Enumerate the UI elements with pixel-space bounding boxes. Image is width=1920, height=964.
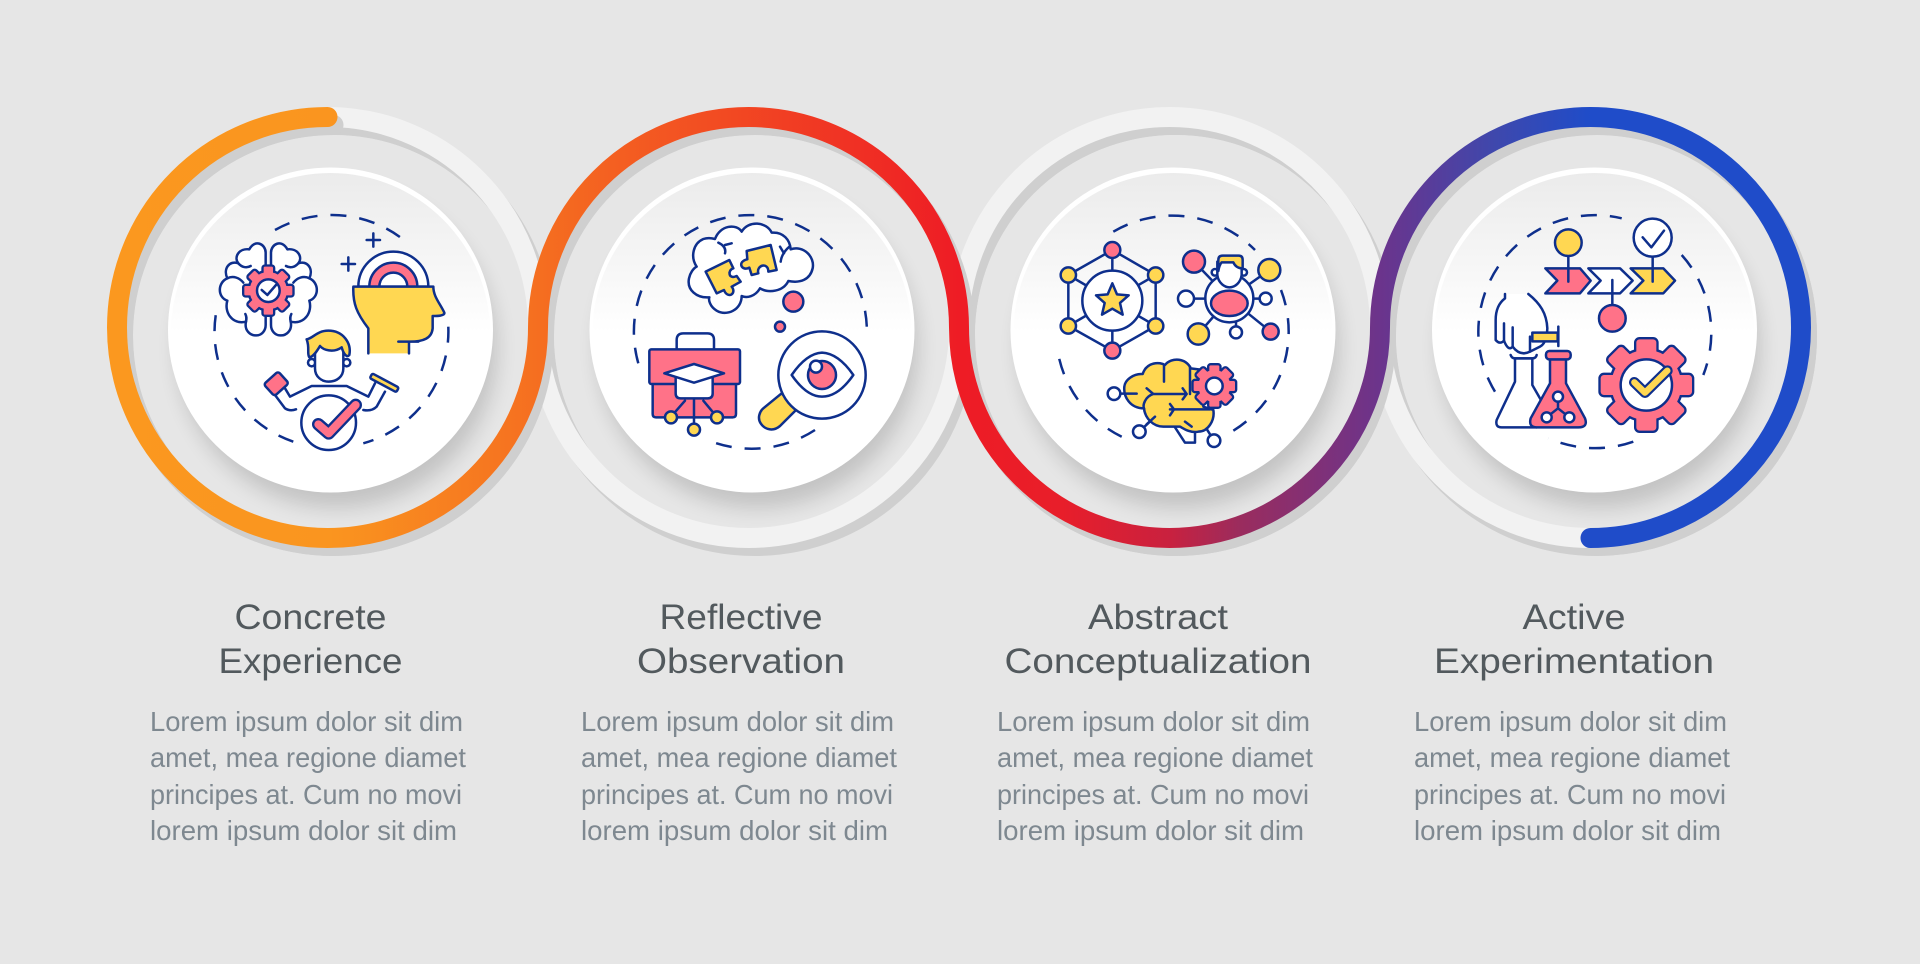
text block: column 1: Lorem ipsum dolor sit dim (150, 706, 463, 737)
text block: column 4: Lorem ipsum dolor sit dim (1414, 706, 1727, 737)
heading: Concrete Experience: Experience (218, 642, 402, 681)
dashed circle 1 (215, 215, 448, 443)
icon: head with magnet (342, 233, 444, 353)
icon: person network (1178, 251, 1280, 345)
text block: column 2: Lorem ipsum dolor sit dim (581, 706, 894, 737)
text block: column 3: principes at. Cum no movi (997, 779, 1309, 810)
icon: concrete experience (220, 233, 444, 450)
icon: process chevrons (1545, 219, 1675, 332)
heading: Reflective Observation (637, 598, 845, 681)
dashed circle 4 (1478, 215, 1711, 448)
ring shadows (123, 125, 1807, 546)
text block: column 1: amet, mea regione diamet (150, 742, 466, 773)
icon: hand with test tube (1496, 294, 1558, 353)
text block: column 3 (997, 706, 1313, 846)
panel: disc 3 (1010, 168, 1336, 492)
text block: column 4: lorem ipsum dolor sit dim (1414, 815, 1721, 846)
icon: active experimentation (1496, 219, 1692, 431)
text block: column 2: amet, mea regione diamet (581, 742, 897, 773)
icon: reflective observation (649, 224, 866, 436)
dashed circle 3 (1058, 216, 1289, 437)
icon: flasks (1496, 351, 1586, 427)
heading: Reflective Observation: Observation (637, 642, 845, 681)
dashed circle 2 (634, 215, 867, 449)
panel: disc 1 (168, 168, 493, 492)
icon: briefcase with graduation cap (649, 333, 740, 436)
text block: column 2: principes at. Cum no movi (581, 779, 893, 810)
icon: gear with check (1601, 339, 1692, 431)
heading: Concrete Experience (218, 598, 402, 681)
text block: column 1: lorem ipsum dolor sit dim (150, 815, 457, 846)
icon: brain with gear (220, 243, 317, 335)
disc shadows (177, 188, 1760, 508)
text block: column 1 (150, 706, 466, 846)
heading: Active Experimentation: Active (1522, 598, 1626, 637)
text block: column 4: principes at. Cum no movi (1414, 779, 1726, 810)
heading: Abstract Conceptualization: Conceptualization (1004, 642, 1312, 681)
gradient ribbon (117, 117, 1801, 538)
text block: column 1: principes at. Cum no movi (150, 779, 462, 810)
text block: column 2 (581, 706, 897, 846)
text block: column 4: amet, mea regione diamet (1414, 742, 1730, 773)
panel: disc 4 (1432, 168, 1757, 492)
heading: Reflective Observation: Reflective (660, 598, 822, 637)
icon: brain with gear and nodes (1108, 360, 1235, 447)
heading: Active Experimentation (1434, 598, 1714, 681)
heading: Abstract Conceptualization (1004, 598, 1312, 681)
panel: disc 2 (590, 168, 914, 492)
heading: Active Experimentation: Experimentation (1434, 642, 1714, 681)
text block: column 3: amet, mea regione diamet (997, 742, 1313, 773)
light rings (117, 117, 1801, 538)
icon: thought cloud with puzzle (689, 224, 813, 332)
icon: abstract conceptualization (1061, 242, 1280, 447)
ribbon shadow (123, 125, 1807, 546)
text block: column 3: Lorem ipsum dolor sit dim (997, 706, 1310, 737)
text block: column 3: lorem ipsum dolor sit dim (997, 815, 1304, 846)
icon: person with check (264, 331, 399, 450)
icon: magnifier with eye (759, 331, 866, 429)
inner ring wells (133, 135, 1797, 536)
heading: Concrete Experience: Concrete (234, 598, 386, 637)
text block: column 2: lorem ipsum dolor sit dim (581, 815, 888, 846)
heading: Abstract Conceptualization: Abstract (1088, 598, 1228, 637)
icon: hexagon network with star (1061, 242, 1163, 359)
text block: column 4 (1414, 706, 1730, 846)
